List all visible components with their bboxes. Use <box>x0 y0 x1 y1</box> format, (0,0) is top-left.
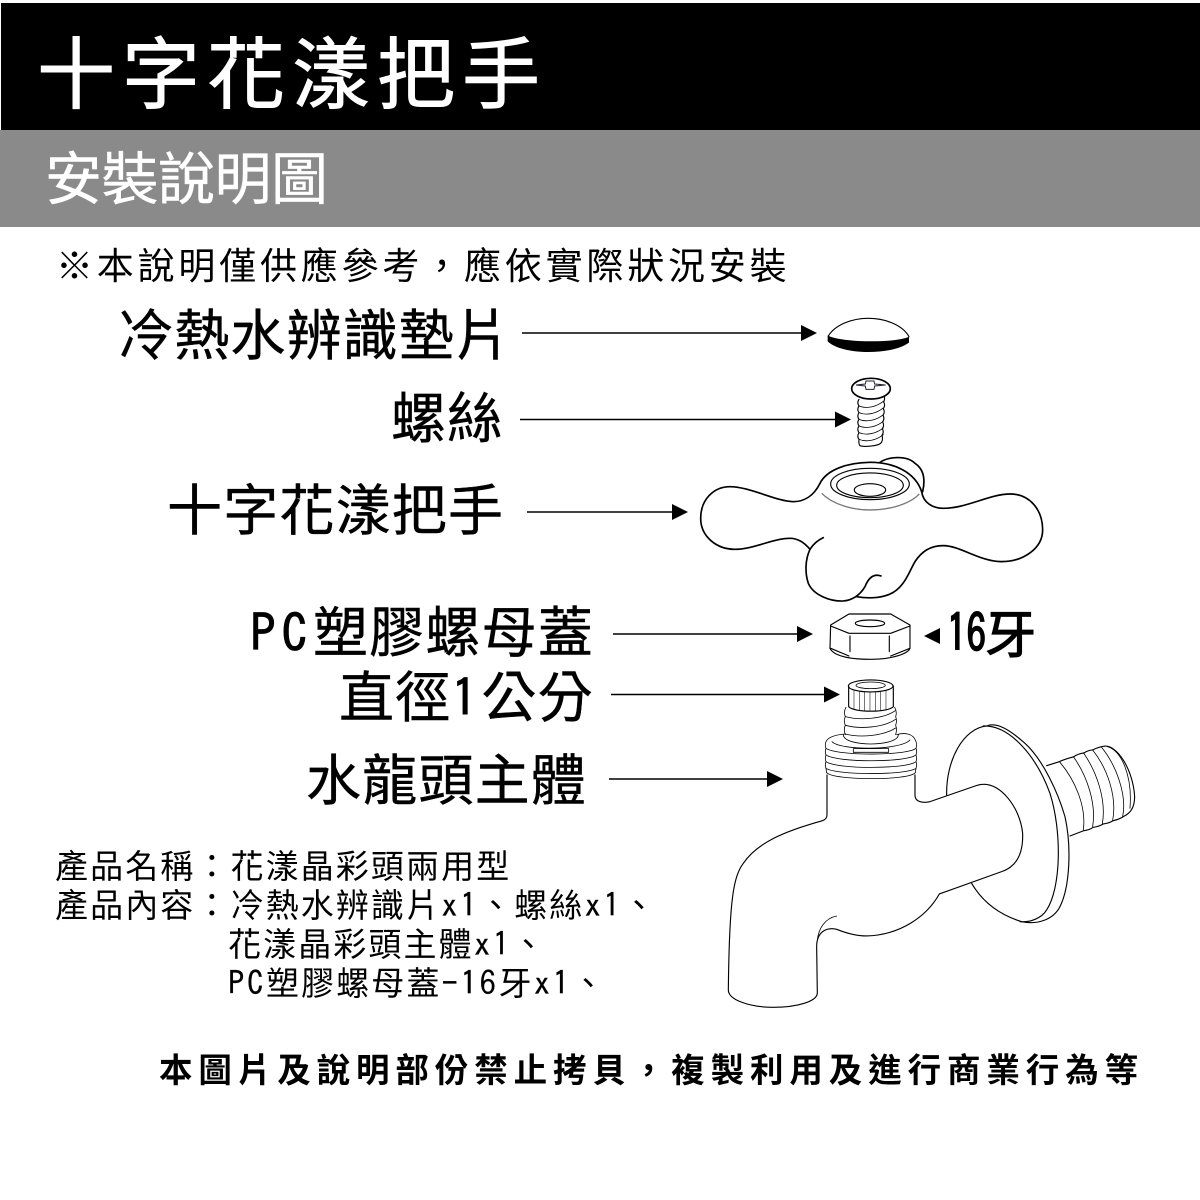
label: 16 teeth <box>947 594 1036 668</box>
text block: product info: 花漾晶彩頭主體x1、 <box>228 918 547 966</box>
icon: cross handle <box>701 458 1043 601</box>
arrow: to spindle <box>611 686 840 702</box>
label: 16 teeth: 牙 <box>985 594 1036 668</box>
icon: PC nut cap <box>830 614 910 659</box>
arrow: to handle <box>527 504 688 520</box>
label: identification cap: 冷熱水辨識墊片 <box>118 291 511 371</box>
arrow: to screw <box>520 412 851 428</box>
header band: subtitle <box>0 130 1200 227</box>
icon: faucet spindle <box>844 680 896 736</box>
label: PC nut cap: PC塑膠螺母蓋 <box>250 588 594 668</box>
text block: product info: 產品名稱：花漾晶彩頭兩用型 <box>55 840 511 888</box>
label: screw: 螺絲 <box>391 374 503 454</box>
header band: title: 十字花漾把手 <box>37 13 547 125</box>
arrow: to nut cap <box>613 626 813 642</box>
arrow: to cap <box>522 325 817 341</box>
icon: screw <box>852 378 890 446</box>
note: ※本說明僅供應參考，應依實際狀況安裝 <box>56 236 790 290</box>
text block: product info: 產品內容：冷熱水辨識片x1、螺絲x1、 <box>55 879 658 927</box>
label: faucet body: 水龍頭主體 <box>306 736 587 816</box>
label: 16 teeth: 16 <box>947 607 986 659</box>
arrow: to faucet body <box>609 771 783 787</box>
text block: product info <box>55 840 658 1005</box>
icon: faucet body <box>728 725 1135 1007</box>
header band: title <box>1 3 1200 130</box>
text block: product info: PC塑膠螺母蓋-16牙x1、 <box>228 957 607 1005</box>
header band: subtitle: 安裝說明圖 <box>45 134 328 216</box>
arrow: 16 teeth pointer <box>924 628 940 644</box>
icon: identification cap <box>828 318 909 352</box>
label: diameter: 直徑1公分 <box>339 653 594 733</box>
label: cross handle: 十字花漾把手 <box>167 466 504 546</box>
footer notice: 本圖片及說明部份禁止拷貝，複製利用及進行商業行為等 <box>159 1043 1144 1092</box>
